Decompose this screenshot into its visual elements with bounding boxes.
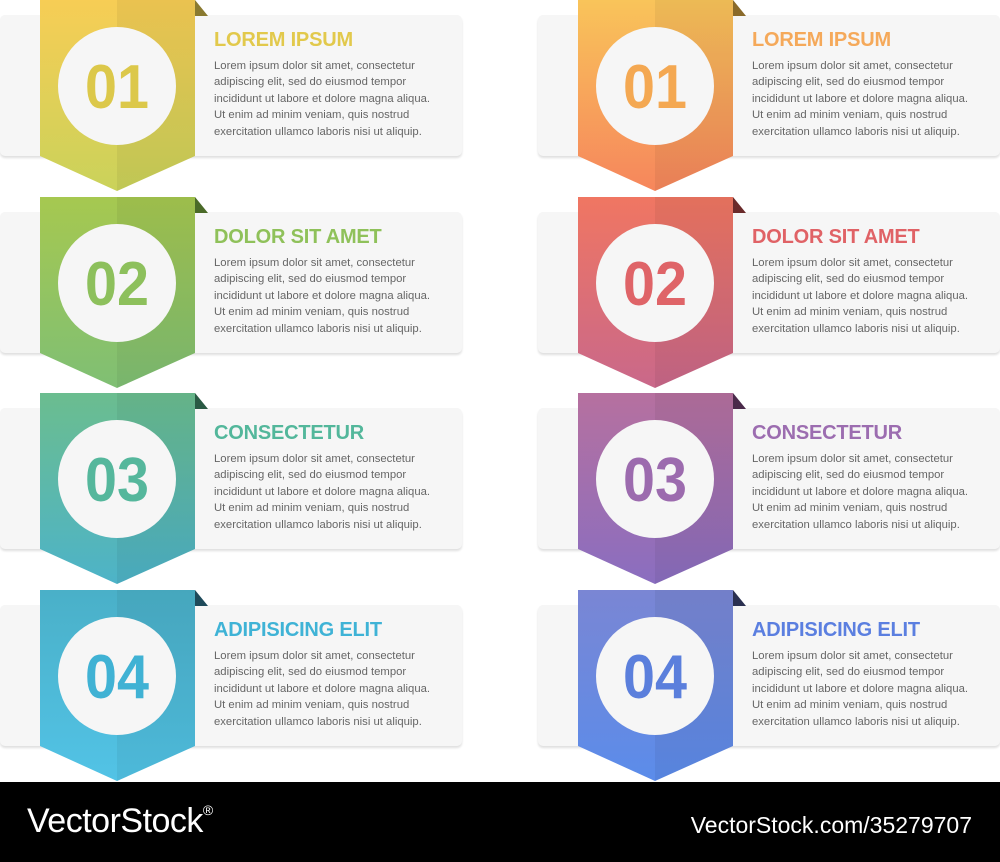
row: right 04 bbox=[538, 590, 1000, 781]
row: right 01 bbox=[538, 0, 1000, 191]
badge 03: 03 bbox=[85, 446, 149, 515]
badge 04 bbox=[40, 590, 208, 781]
text: incididunt ut labore et dolore magna aliqua. bbox=[214, 683, 430, 695]
text: incididunt ut labore et dolore magna aliqua. bbox=[214, 486, 430, 498]
text bbox=[752, 650, 968, 728]
text bbox=[214, 60, 430, 138]
badge 01 bbox=[578, 0, 746, 191]
text: exercitation ullamco laboris nisi ut aliquip. bbox=[752, 519, 960, 531]
title: CONSECTETUR bbox=[214, 422, 364, 444]
text: adipiscing elit, sed do eiusmod tempor bbox=[752, 76, 944, 88]
text: Ut enim ad minim veniam, quis nostrud bbox=[752, 699, 947, 711]
text bbox=[214, 650, 430, 728]
text: incididunt ut labore et dolore magna aliqua. bbox=[752, 290, 968, 302]
title: LOREM IPSUM bbox=[214, 29, 353, 51]
title: DOLOR SIT AMET bbox=[752, 226, 920, 248]
badge 04: 04 bbox=[623, 643, 687, 712]
card bbox=[0, 15, 462, 156]
footer url: VectorStock.com/35279707 bbox=[691, 812, 972, 838]
row: left 03 bbox=[0, 393, 462, 584]
badge 01: 01 bbox=[85, 53, 149, 122]
row: right 03 bbox=[538, 393, 1000, 584]
badge 03 bbox=[40, 393, 208, 584]
text: exercitation ullamco laboris nisi ut aliquip. bbox=[214, 126, 422, 138]
row: left 04 bbox=[0, 590, 462, 781]
text: Ut enim ad minim veniam, quis nostrud bbox=[214, 109, 409, 121]
text: Lorem ipsum dolor sit amet, consectetur bbox=[214, 60, 415, 72]
text: Lorem ipsum dolor sit amet, consectetur bbox=[752, 650, 953, 662]
text bbox=[214, 257, 430, 335]
badge 02 bbox=[40, 197, 208, 388]
text: Ut enim ad minim veniam, quis nostrud bbox=[214, 502, 409, 514]
card bbox=[0, 408, 462, 549]
badge 02: 02 bbox=[85, 250, 149, 319]
text: adipiscing elit, sed do eiusmod tempor bbox=[214, 76, 406, 88]
text: Lorem ipsum dolor sit amet, consectetur bbox=[752, 453, 953, 465]
title: ADIPISICING ELIT bbox=[214, 619, 382, 641]
text bbox=[214, 453, 430, 531]
text: Ut enim ad minim veniam, quis nostrud bbox=[214, 306, 409, 318]
text: incididunt ut labore et dolore magna aliqua. bbox=[214, 93, 430, 105]
footer bar bbox=[0, 782, 1000, 862]
text: exercitation ullamco laboris nisi ut aliquip. bbox=[214, 323, 422, 335]
title: DOLOR SIT AMET bbox=[214, 226, 382, 248]
badge 02: 02 bbox=[623, 250, 687, 319]
title: LOREM IPSUM bbox=[752, 29, 891, 51]
text: adipiscing elit, sed do eiusmod tempor bbox=[752, 469, 944, 481]
text: adipiscing elit, sed do eiusmod tempor bbox=[214, 469, 406, 481]
badge 04 bbox=[578, 590, 746, 781]
badge 02 bbox=[578, 197, 746, 388]
text bbox=[752, 257, 968, 335]
text: Ut enim ad minim veniam, quis nostrud bbox=[752, 306, 947, 318]
text: Lorem ipsum dolor sit amet, consectetur bbox=[214, 650, 415, 662]
badge 01: 01 bbox=[623, 53, 687, 122]
row: right 02 bbox=[538, 197, 1000, 388]
title: CONSECTETUR bbox=[752, 422, 902, 444]
text: exercitation ullamco laboris nisi ut aliquip. bbox=[214, 716, 422, 728]
row: left 02 bbox=[0, 197, 462, 388]
text: Ut enim ad minim veniam, quis nostrud bbox=[752, 502, 947, 514]
text: exercitation ullamco laboris nisi ut aliquip. bbox=[214, 519, 422, 531]
text: adipiscing elit, sed do eiusmod tempor bbox=[214, 273, 406, 285]
card bbox=[538, 212, 1000, 353]
text: Lorem ipsum dolor sit amet, consectetur bbox=[214, 453, 415, 465]
text: incididunt ut labore et dolore magna aliqua. bbox=[752, 486, 968, 498]
badge 03 bbox=[578, 393, 746, 584]
text: Lorem ipsum dolor sit amet, consectetur bbox=[752, 60, 953, 72]
text: Lorem ipsum dolor sit amet, consectetur bbox=[752, 257, 953, 269]
text: incididunt ut labore et dolore magna aliqua. bbox=[752, 683, 968, 695]
card bbox=[538, 408, 1000, 549]
text: Ut enim ad minim veniam, quis nostrud bbox=[752, 109, 947, 121]
card bbox=[0, 212, 462, 353]
footer logo: VectorStock® bbox=[27, 802, 213, 840]
card bbox=[538, 15, 1000, 156]
row: left 01 bbox=[0, 0, 462, 191]
text bbox=[752, 453, 968, 531]
text bbox=[752, 60, 968, 138]
text: adipiscing elit, sed do eiusmod tempor bbox=[752, 273, 944, 285]
text: exercitation ullamco laboris nisi ut aliquip. bbox=[752, 126, 960, 138]
text: Lorem ipsum dolor sit amet, consectetur bbox=[214, 257, 415, 269]
badge 03: 03 bbox=[623, 446, 687, 515]
text: incididunt ut labore et dolore magna aliqua. bbox=[214, 290, 430, 302]
title: ADIPISICING ELIT bbox=[752, 619, 920, 641]
text: exercitation ullamco laboris nisi ut aliquip. bbox=[752, 716, 960, 728]
text: exercitation ullamco laboris nisi ut aliquip. bbox=[752, 323, 960, 335]
text: adipiscing elit, sed do eiusmod tempor bbox=[752, 666, 944, 678]
badge 01 bbox=[40, 0, 208, 191]
text: incididunt ut labore et dolore magna aliqua. bbox=[752, 93, 968, 105]
card bbox=[0, 605, 462, 746]
card bbox=[538, 605, 1000, 746]
text: Ut enim ad minim veniam, quis nostrud bbox=[214, 699, 409, 711]
badge 04: 04 bbox=[85, 643, 149, 712]
text: adipiscing elit, sed do eiusmod tempor bbox=[214, 666, 406, 678]
